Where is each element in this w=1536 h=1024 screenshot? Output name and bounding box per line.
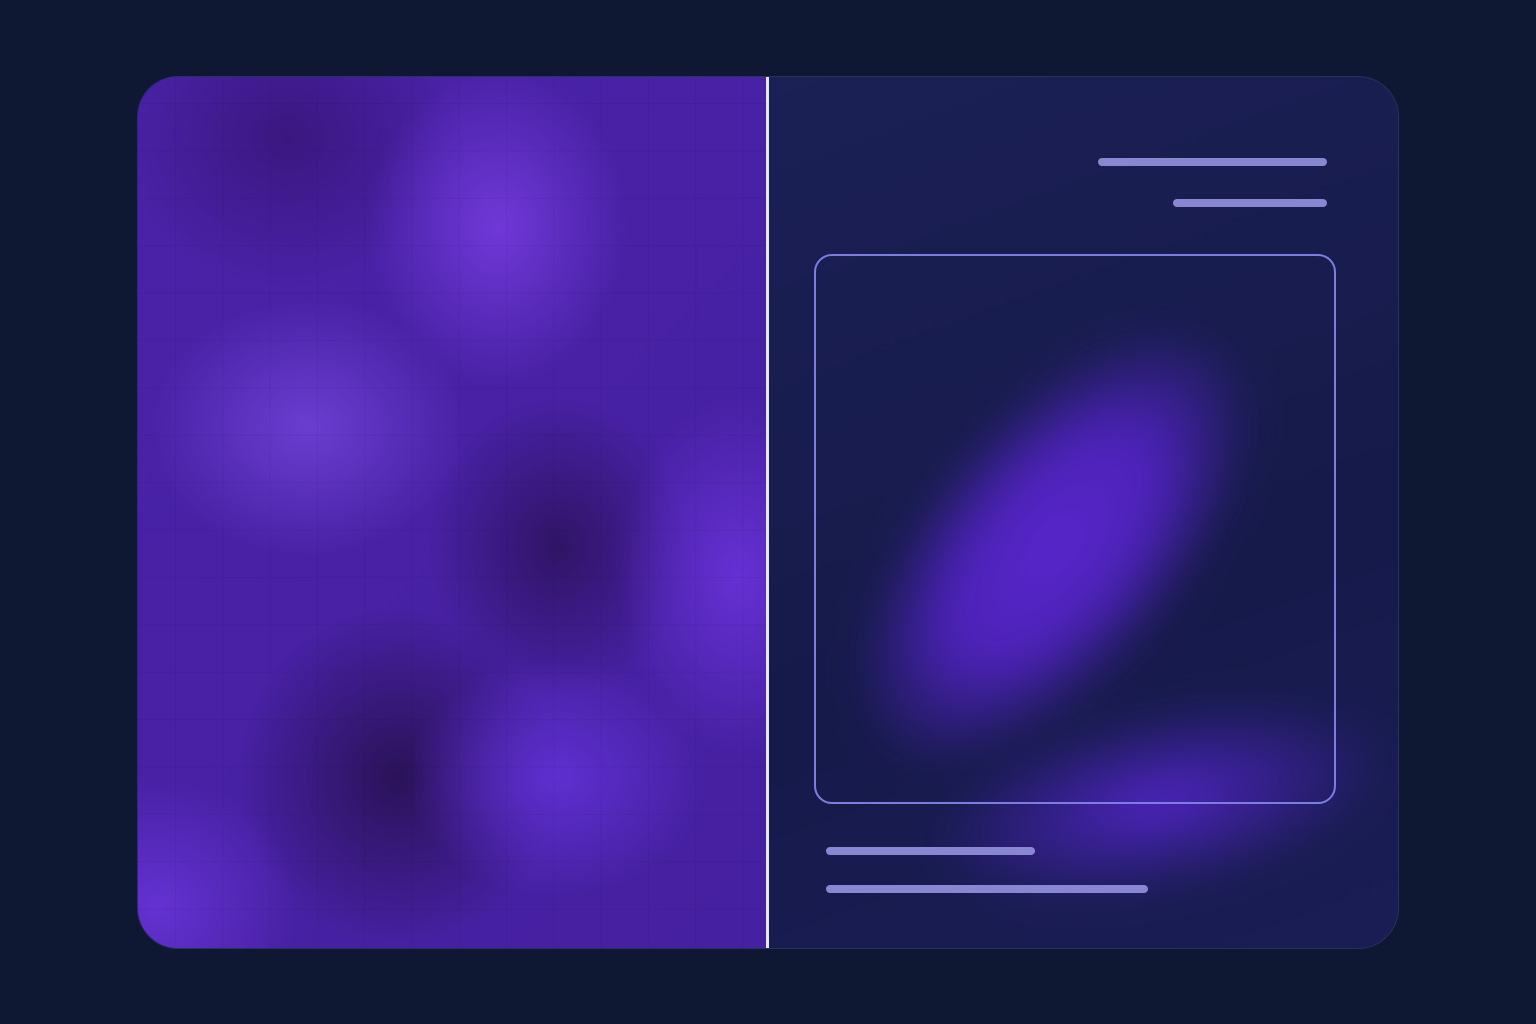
divider line — [766, 77, 769, 948]
card — [138, 77, 1398, 948]
image frame — [814, 254, 1336, 804]
text line top 2 — [1173, 199, 1327, 207]
panel: pixelated image — [138, 77, 767, 948]
text line bottom 2 — [826, 885, 1148, 893]
panel: smooth image — [769, 77, 1398, 948]
glow blob — [777, 253, 1331, 841]
text line top 1 — [1098, 158, 1327, 166]
text line bottom 1 — [826, 847, 1035, 855]
glow blob lower — [904, 659, 1414, 945]
